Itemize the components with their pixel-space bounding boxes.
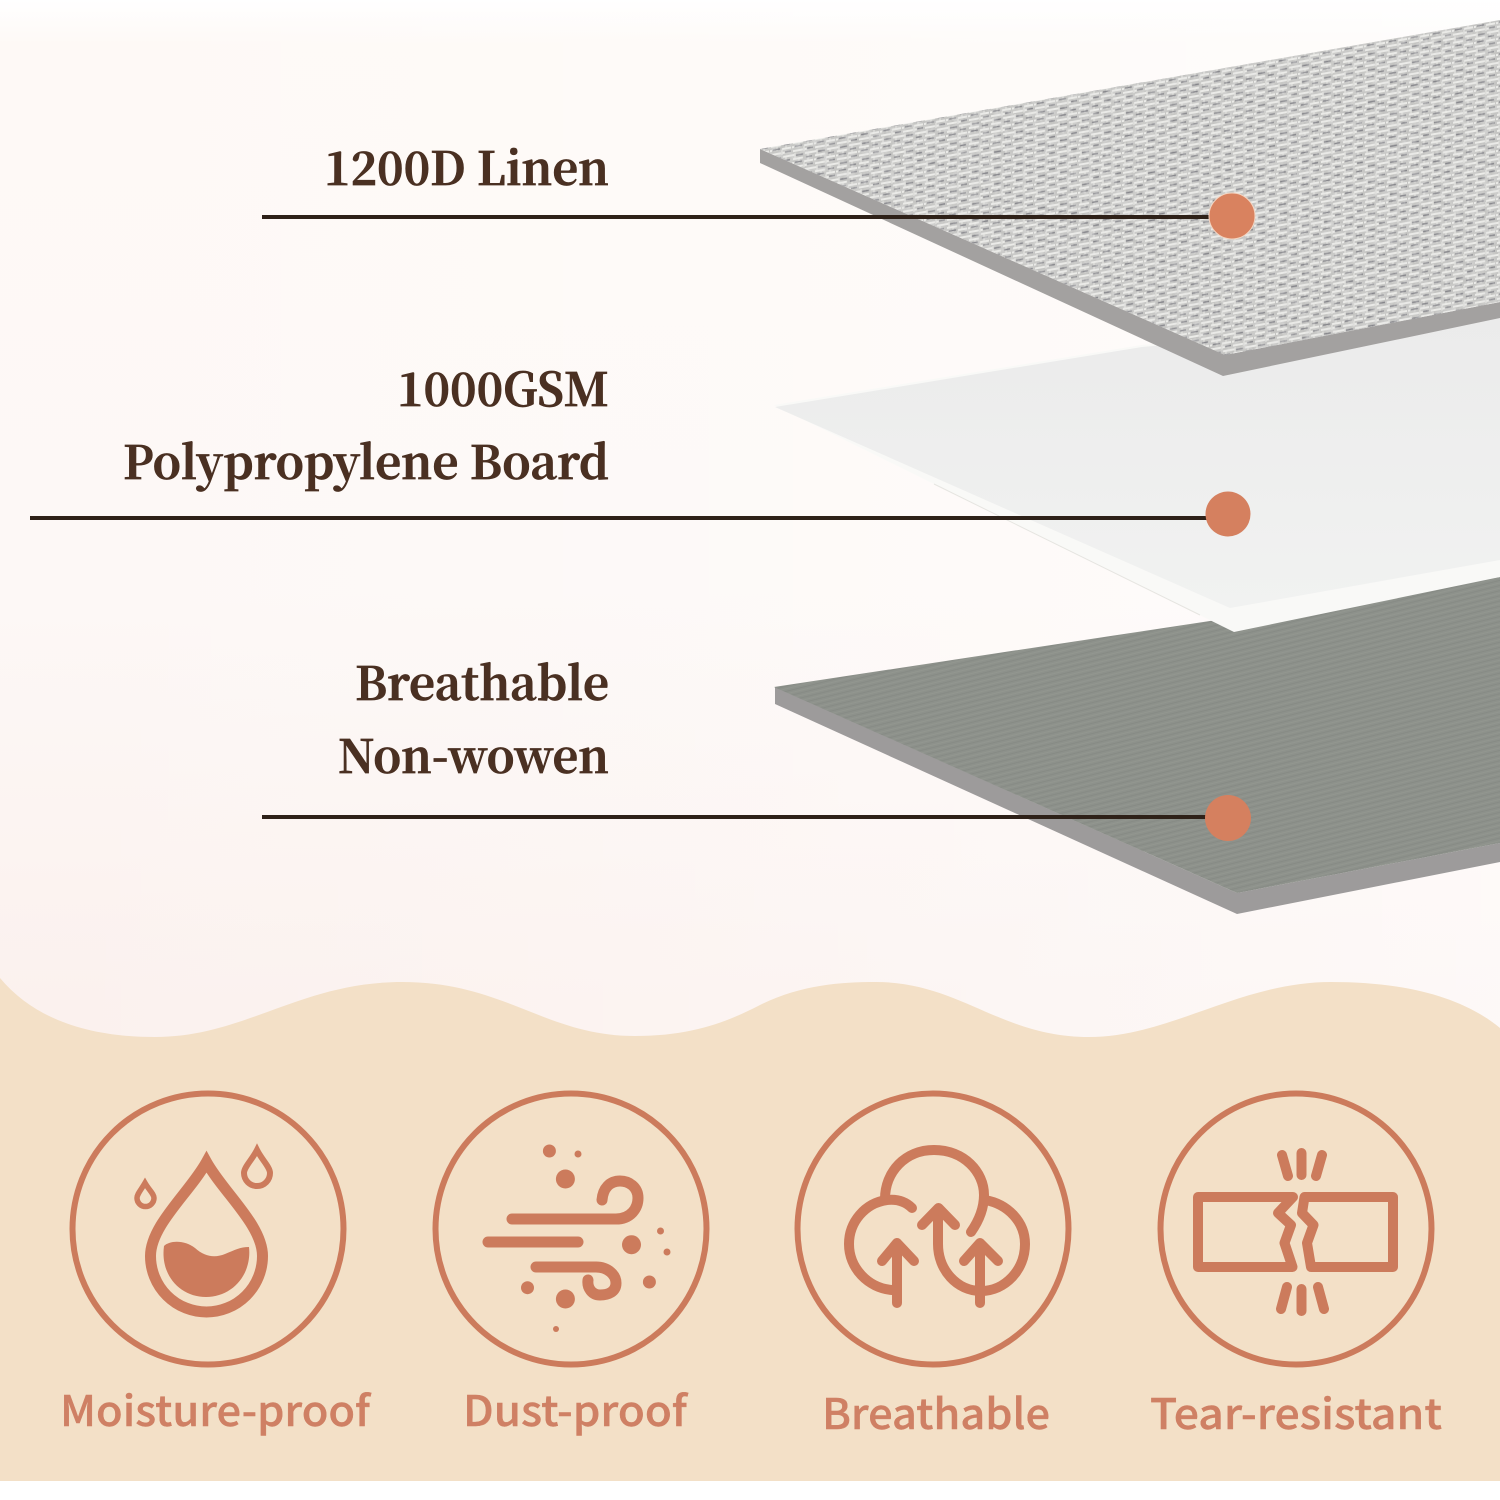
- callout: 1000GSM Polypropylene Board: 1000GSM: [397, 354, 609, 420]
- label: Dust-proof: Dust-proof: [463, 1378, 689, 1439]
- panel: layered material sheets: [750, 15, 1500, 914]
- icon: breathable: [798, 1094, 1068, 1364]
- sheet: linen: [750, 15, 1500, 376]
- callout: 1000GSM Polypropylene Board: Polypropylene Board: [123, 427, 609, 493]
- label: Moisture-proof: Moisture-proof: [60, 1378, 372, 1439]
- icon: dust-proof: [436, 1094, 706, 1364]
- label: Breathable: Breathable: [822, 1381, 1050, 1442]
- callout: Breathable Non-wowen: [262, 648, 1251, 841]
- panel: cream wave band: [0, 978, 1500, 1481]
- icon: tear-resistant: [1160, 1094, 1432, 1364]
- icon: moisture-proof: [72, 1094, 344, 1364]
- callout: 1200D Linen: 1200D Linen: [324, 133, 609, 199]
- label: Tear-resistant: Tear-resistant: [1150, 1381, 1442, 1442]
- sheet: polypropylene board: [774, 318, 1500, 632]
- sheet: breathable non-woven: [774, 577, 1500, 914]
- callout: 1200D Linen: [262, 133, 1255, 239]
- callout: 1000GSM Polypropylene Board: [30, 354, 1250, 536]
- callout: Breathable Non-wowen: Breathable: [355, 648, 609, 714]
- callout: Breathable Non-wowen: Non-wowen: [338, 721, 609, 787]
